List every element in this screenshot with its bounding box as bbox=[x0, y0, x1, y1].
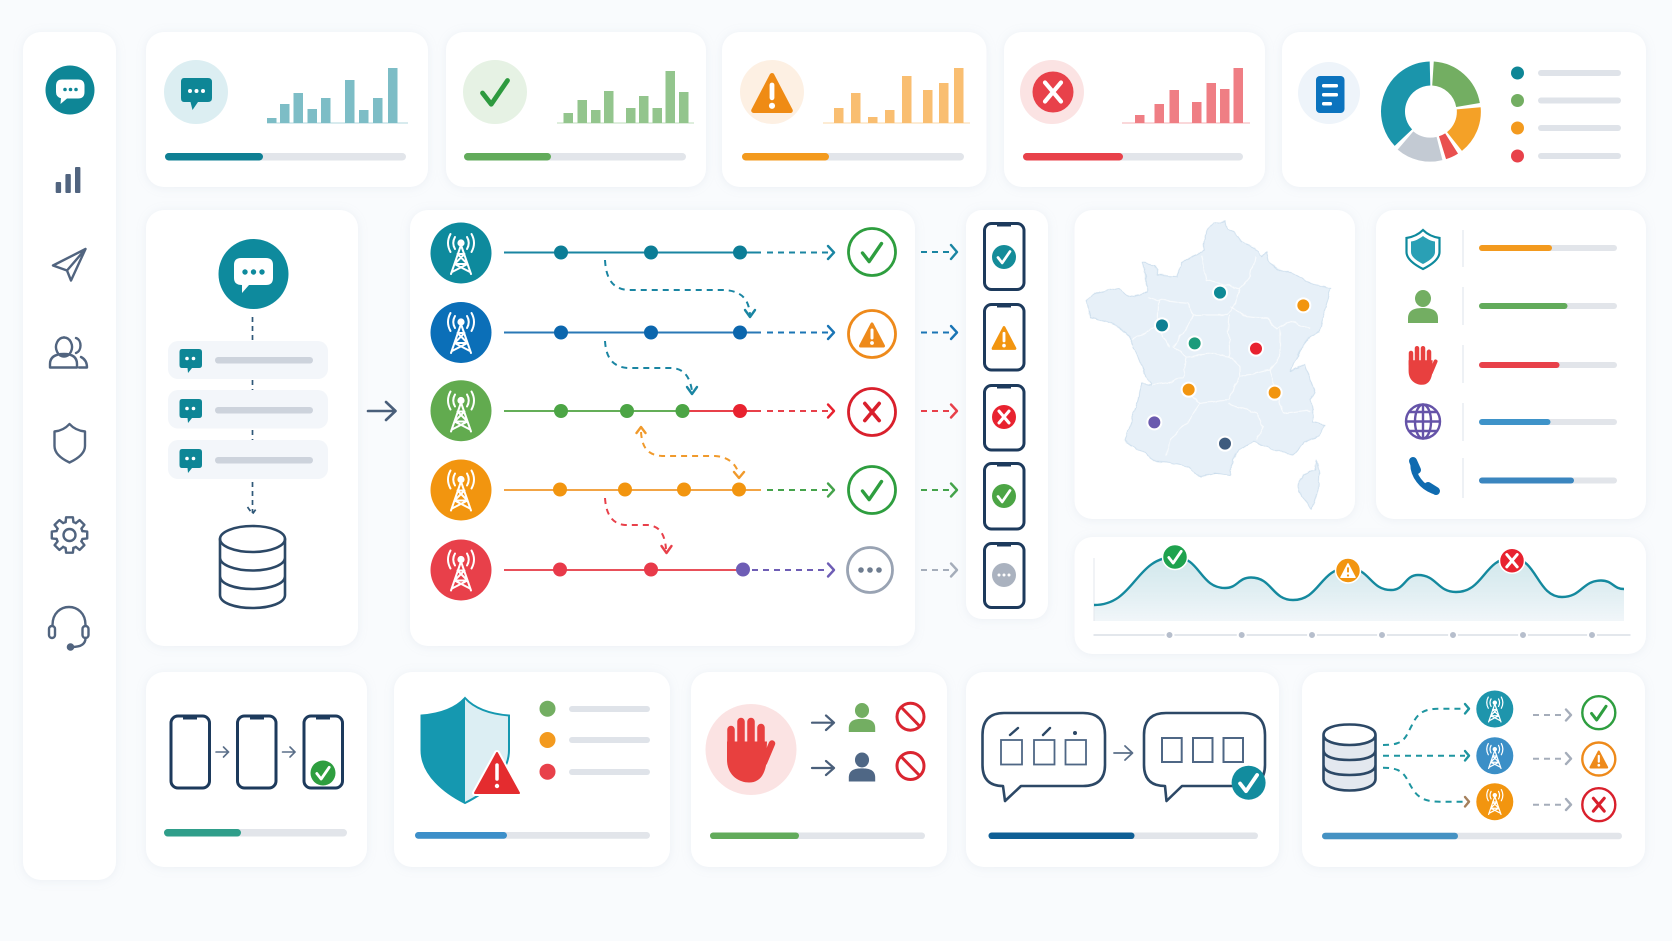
icon: document bbox=[1298, 62, 1360, 124]
metric bar 1 bbox=[1479, 245, 1617, 251]
panel: distribution bbox=[1282, 32, 1646, 187]
map bbox=[1086, 220, 1332, 508]
phone 2 bbox=[238, 716, 276, 788]
panel: map of France bbox=[1074, 210, 1355, 519]
icon: send bbox=[53, 249, 86, 280]
arrow: source to routing bbox=[368, 402, 396, 420]
tower 1 bbox=[1476, 690, 1513, 728]
panel: message transform bbox=[966, 672, 1279, 867]
legend bbox=[540, 701, 650, 780]
bubble: after bbox=[1144, 713, 1265, 801]
panel: success KPI bbox=[446, 32, 706, 187]
tower 2 bbox=[1476, 737, 1513, 774]
bar chart bbox=[557, 71, 694, 124]
phone: confirmed bbox=[984, 463, 1024, 529]
icon: stop hand bbox=[706, 704, 796, 795]
panel: phones bbox=[966, 210, 1048, 619]
phone: pending bbox=[984, 543, 1024, 608]
icon: gear bbox=[52, 517, 87, 553]
status warning bbox=[1582, 742, 1615, 776]
tower 3 bbox=[1476, 783, 1513, 820]
panel: block users bbox=[691, 672, 947, 867]
phone 3 with check bbox=[304, 716, 342, 788]
icon: chat logo bbox=[46, 66, 94, 114]
arrow bbox=[282, 747, 295, 757]
bar chart bbox=[267, 68, 408, 124]
panel: routing flow bbox=[410, 210, 957, 646]
progress bar bbox=[710, 832, 925, 839]
legend bbox=[1511, 66, 1621, 162]
icon: shield with warning bbox=[422, 698, 519, 803]
area line chart bbox=[1094, 557, 1624, 621]
route 2 bbox=[430, 302, 957, 394]
marker: warning bbox=[1336, 558, 1360, 583]
phone: rejected bbox=[984, 385, 1024, 450]
metric bar 4 bbox=[1479, 419, 1617, 425]
progress bar bbox=[742, 153, 964, 160]
icon: users bbox=[50, 338, 87, 368]
message row 1 bbox=[168, 341, 328, 379]
phone: delivered bbox=[984, 223, 1024, 290]
route 4 bbox=[430, 460, 957, 553]
status error bbox=[1582, 788, 1615, 821]
marker: error bbox=[1500, 548, 1524, 573]
progress bar bbox=[464, 153, 686, 160]
panel: error KPI bbox=[1004, 32, 1265, 187]
icon: check badge bbox=[1232, 766, 1266, 800]
status check bbox=[1582, 696, 1615, 729]
donut chart bbox=[1393, 74, 1469, 150]
arrow bbox=[1114, 746, 1132, 760]
progress bar bbox=[415, 832, 650, 839]
metric bar 2 bbox=[1479, 303, 1617, 309]
icon: shield bbox=[1406, 230, 1440, 269]
icon: check bbox=[463, 60, 527, 124]
marker: success bbox=[1162, 544, 1188, 570]
icon: allowed person bbox=[849, 703, 875, 732]
icon: error bbox=[1020, 60, 1084, 124]
dashed connector bbox=[248, 317, 258, 514]
gray dashed arrows bbox=[1533, 710, 1571, 810]
panel: messages KPI bbox=[146, 32, 428, 187]
panel: security alert bbox=[394, 672, 670, 867]
icon: person bbox=[1408, 290, 1438, 323]
icon: database bbox=[1324, 724, 1376, 790]
arrow bbox=[216, 747, 228, 757]
bar chart bbox=[1122, 68, 1250, 124]
route 5 bbox=[430, 540, 957, 600]
panel: warning KPI bbox=[722, 32, 986, 187]
panel: trend line chart bbox=[1074, 537, 1646, 654]
icon: chat bubble bbox=[164, 60, 228, 124]
icon: phone handset bbox=[1413, 461, 1436, 491]
icon: globe bbox=[1406, 404, 1440, 438]
icon: hand bbox=[1409, 348, 1436, 385]
panel: phone sequence bbox=[146, 672, 367, 867]
arrows bbox=[812, 716, 834, 775]
bubble: before bbox=[982, 713, 1105, 801]
panel: database routing bbox=[1302, 672, 1645, 867]
route 1 bbox=[430, 222, 957, 317]
dashed fan-out connectors bbox=[1383, 704, 1469, 806]
metric bar 5 bbox=[1479, 478, 1617, 484]
progress bar bbox=[1023, 153, 1243, 160]
progress bar bbox=[164, 829, 347, 836]
message row 3 bbox=[168, 440, 328, 479]
message row 2 bbox=[168, 390, 328, 428]
dividers bbox=[1462, 230, 1464, 498]
icon: headset bbox=[49, 607, 88, 650]
phone: warning bbox=[984, 304, 1024, 370]
metric bar 3 bbox=[1479, 362, 1617, 368]
icon: warning bbox=[740, 60, 804, 124]
icon: bars bbox=[56, 167, 80, 193]
icon: shield bbox=[54, 424, 85, 462]
progress bar bbox=[165, 153, 406, 160]
bar chart bbox=[823, 68, 970, 124]
timeline bbox=[1094, 631, 1630, 639]
panel: channel metrics bbox=[1376, 210, 1646, 519]
icon: prohibited 1 bbox=[897, 703, 924, 730]
icon: prohibited 2 bbox=[897, 752, 924, 780]
sidebar panel bbox=[23, 32, 116, 880]
panel: message source bbox=[146, 210, 358, 646]
icon: chat bbox=[218, 239, 288, 309]
progress bar bbox=[1322, 833, 1622, 839]
icon: slate person bbox=[849, 752, 875, 782]
phone 1 bbox=[171, 716, 210, 788]
icon: database bbox=[220, 526, 285, 608]
route 3 bbox=[430, 380, 957, 478]
progress bar bbox=[988, 832, 1258, 839]
